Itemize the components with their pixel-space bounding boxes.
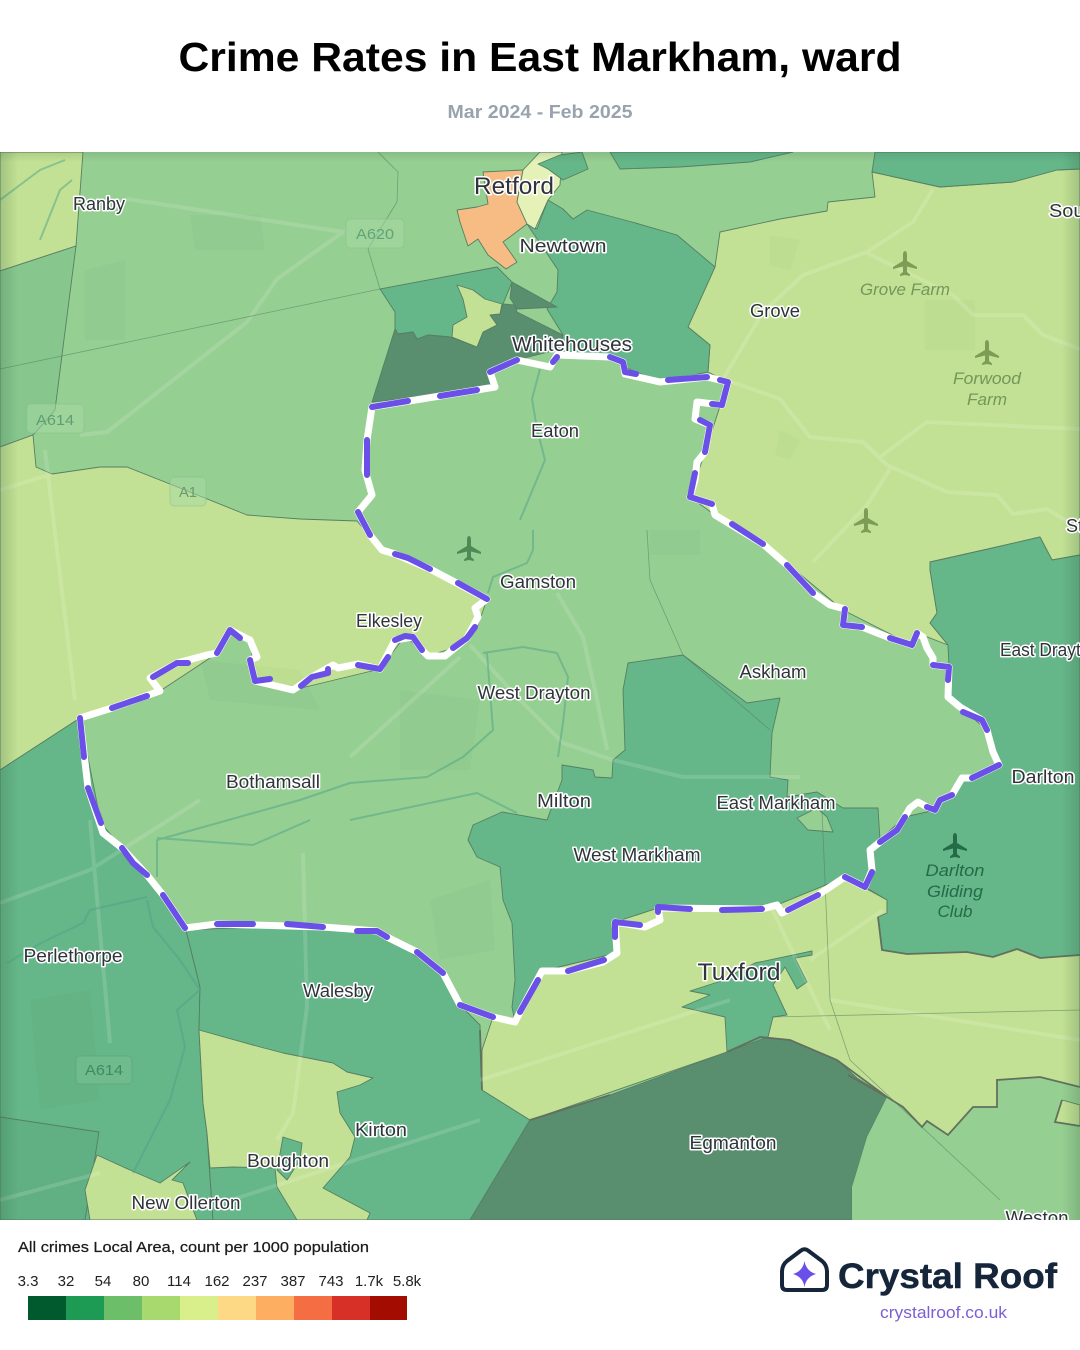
wordmark: Crystal Roof: [838, 1257, 1057, 1296]
place names: Newtown: [520, 236, 606, 256]
road shields: [27, 219, 404, 1084]
place names: Grove: [750, 301, 800, 321]
place names: Askham: [740, 662, 806, 682]
airfield names: Farm: [967, 390, 1007, 409]
place names: West Markham: [574, 845, 700, 865]
airfield names: Grove Farm: [860, 280, 950, 299]
map: [0, 152, 1080, 1228]
rivers: [0, 160, 568, 1173]
place names: Whitehouses: [512, 334, 632, 356]
place names: Darlton: [1012, 767, 1074, 787]
airfield names: Gliding: [927, 882, 984, 901]
ward boundary: [80, 355, 999, 1022]
roads: [0, 189, 1080, 1210]
road shields: A1: [179, 484, 197, 501]
woodland patches: [30, 215, 975, 1110]
legend: [18, 1239, 422, 1320]
place names: Eaton: [531, 421, 579, 441]
place names: Kirton: [355, 1120, 407, 1140]
place names: Boughton: [247, 1151, 329, 1171]
road shields: A620: [356, 226, 394, 243]
place names: Milton: [537, 791, 591, 811]
legend values: 1.7k: [355, 1273, 384, 1290]
legend values: 54: [95, 1273, 111, 1290]
place names: West Drayton: [478, 683, 590, 703]
place names: Ranby: [73, 194, 125, 214]
legend values: 114: [167, 1273, 191, 1290]
place names: Retford: [474, 173, 554, 200]
road shields: A614: [36, 412, 74, 429]
airfield names: Club: [938, 902, 972, 921]
legend values: 32: [58, 1273, 74, 1290]
legend values: 162: [204, 1273, 230, 1290]
place names: Egmanton: [690, 1133, 776, 1153]
airfield names: Darlton: [926, 861, 984, 880]
place names: [24, 173, 1080, 1228]
legend values: 80: [133, 1273, 149, 1290]
place names: Elkesley: [356, 611, 422, 631]
road shields: A614: [85, 1062, 123, 1079]
place names: Walesby: [303, 981, 373, 1001]
logo: [782, 1249, 1057, 1322]
icon: house: [782, 1249, 827, 1290]
place names: East Markham: [716, 793, 836, 813]
thick boundary of Tuxford area: [480, 917, 1080, 1135]
legend values: 3.3: [18, 1273, 38, 1290]
thin boundary lines: [0, 152, 1080, 1200]
legend values: 743: [318, 1273, 344, 1290]
airfield names: [860, 280, 1022, 921]
legend values: 387: [280, 1273, 306, 1290]
place names: Perlethorpe: [24, 946, 122, 966]
place names: Tuxford: [698, 959, 780, 986]
place names: Bothamsall: [226, 772, 320, 792]
legend values: 237: [242, 1273, 268, 1290]
choropleth areas: [0, 152, 1080, 1220]
legend values: 5.8k: [393, 1273, 422, 1290]
airfield names: Forwood: [953, 369, 1022, 388]
legend values: [18, 1273, 422, 1290]
map edge shading: [0, 152, 1080, 1220]
place names: Weston: [1006, 1208, 1068, 1228]
place names: New Ollerton: [132, 1193, 240, 1213]
legend colour scale: [28, 1296, 407, 1320]
legend title: All crimes Local Area, count per 1000 population: [18, 1239, 369, 1256]
subtitle: Mar 2024 - Feb 2025: [448, 101, 632, 122]
place names: Gamston: [500, 572, 576, 592]
icon: airfields: [457, 251, 999, 858]
title: Crime Rates in East Markham, ward: [178, 34, 902, 80]
url: crystalroof.co.uk: [880, 1304, 1008, 1322]
